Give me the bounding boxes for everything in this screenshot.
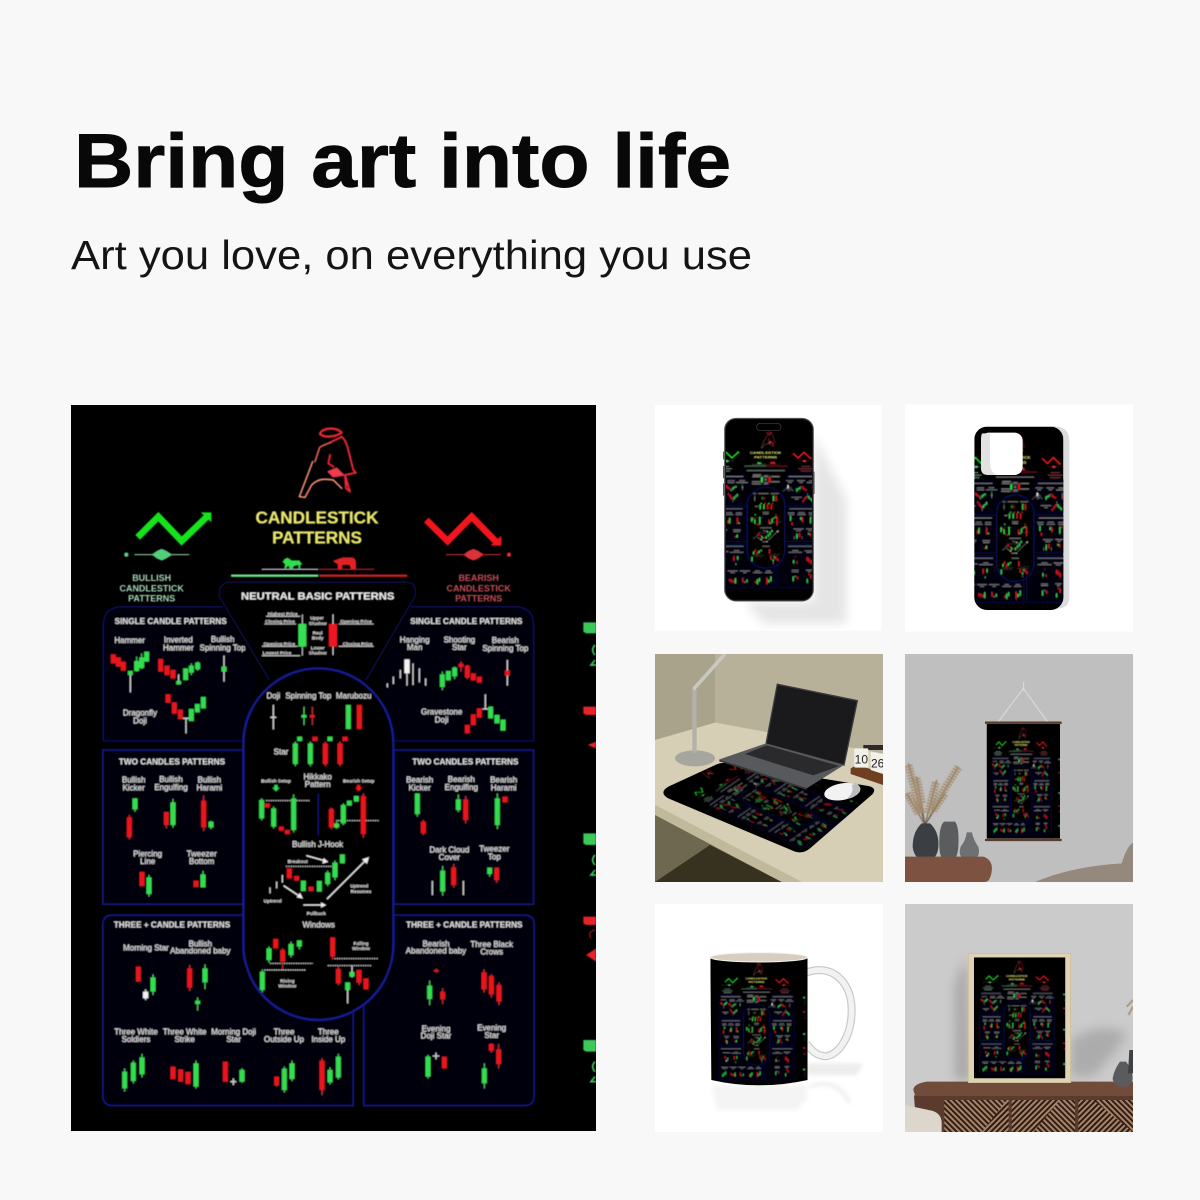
framed artwork: CANDLESTICK: [1006, 974, 1029, 978]
neutral diagram labels: Lower: [311, 645, 325, 650]
case artwork: PATTERNS: [1003, 460, 1026, 465]
armchair: [905, 1105, 942, 1132]
neutral diagram labels: [263, 611, 373, 656]
desk edge and shadow: [655, 805, 802, 882]
walls: [655, 654, 715, 740]
labels: central capsule patterns: Breakout: [288, 859, 308, 864]
mug body with artwork: [710, 953, 808, 1087]
labels: right two candles patterns: Harami: [491, 783, 517, 792]
labels: left two candles patterns: Bullish: [198, 776, 221, 785]
phone screen artwork: [726, 420, 812, 600]
neutral basic patterns panel: [219, 582, 416, 680]
heading: Bring art into life: [74, 119, 731, 204]
phone shadow: [745, 433, 847, 623]
chart: bullish j-hook: [270, 854, 369, 908]
wall shadows: [955, 957, 1127, 1080]
labels: right two candles patterns: Engulfing: [445, 783, 478, 792]
labels: doji, spinning top, marubozu: Doji: [266, 692, 280, 701]
neutral diagram labels: Upper: [310, 616, 324, 621]
labels: right single candle patterns: Spinning Top: [482, 644, 529, 653]
dresser top: [913, 1082, 1133, 1095]
labels: doji, spinning top, marubozu: [266, 692, 371, 701]
label: bearish candlestick patterns: CANDLESTICK: [446, 583, 511, 593]
flip calendar: [851, 745, 885, 785]
framed artwork: PATTERNS: [1009, 977, 1025, 981]
phone screen artwork: PATTERNS: [754, 455, 777, 459]
labels: left two candles patterns: Kicker: [123, 783, 145, 792]
label: bearish candlestick patterns: BEARISH: [458, 573, 499, 583]
labels: right two candles patterns: Bearish: [490, 776, 517, 785]
labels: right three plus candle patterns: Abandoned baby: [406, 947, 466, 956]
labels: doji, spinning top, marubozu: Marubozu: [336, 692, 371, 701]
labels: left two candles patterns: Harami: [196, 783, 222, 792]
labels: central capsule patterns: Window: [278, 983, 297, 988]
labels: right two candles patterns: Dark Cloud: [429, 845, 469, 854]
labels: left three plus candle patterns: THREE + CANDLE PATTERNS: [114, 921, 231, 930]
neutral diagram labels: Lowest Price: [263, 651, 292, 656]
labels: right single candle patterns: Star: [452, 643, 467, 652]
labels: central capsule patterns: Windows: [302, 921, 335, 930]
labels: left three plus candle patterns: Inside Up: [311, 1035, 346, 1044]
side buttons: [724, 452, 814, 496]
neutral diagram labels: Highest Price: [268, 611, 298, 616]
labels: right two candles patterns: Cover: [439, 853, 460, 862]
title: candlestick patterns: [255, 507, 379, 547]
labels: right three plus candle patterns: Evening: [422, 1024, 450, 1033]
labels: central capsule patterns: Window: [352, 946, 370, 951]
tile: phone wallpaper mockup: [723, 418, 846, 622]
flip calendar: 10: [855, 752, 868, 766]
labels: left two candles patterns: Tweezer: [187, 849, 217, 858]
labels: left single candle patterns: Doji: [133, 716, 147, 725]
labels: left single candle patterns: Hammer: [114, 636, 145, 645]
laptop: [719, 684, 857, 790]
desk lamp: [675, 654, 725, 766]
labels: left single candle patterns: Dragonfly: [123, 709, 157, 718]
icon: red down zigzag arrow: [426, 517, 501, 546]
neutral diagram labels: Shadow: [309, 651, 327, 656]
labels: right two candles patterns: Bearish: [448, 775, 475, 784]
cropped edge of repeated artwork: [583, 622, 596, 1082]
labels: left three plus candle patterns: Three White: [163, 1028, 207, 1037]
mug rim: [710, 953, 808, 962]
candles: left two candles patterns: [129, 796, 211, 897]
labels: right single candle patterns: [400, 617, 529, 724]
labels: left three plus candle patterns: Three: [318, 1028, 339, 1037]
labels: left three plus candle patterns: [114, 921, 346, 1044]
labels: central capsule patterns: Uptrend: [264, 899, 282, 904]
candles: right three plus candle patterns: [428, 969, 499, 1088]
labels: left three plus candle patterns: Bullish: [189, 939, 212, 948]
labels: left single candle patterns: SINGLE CANDLE PATTERNS: [115, 617, 227, 626]
labels: left three plus candle patterns: Strike: [174, 1035, 195, 1044]
labels: right single candle patterns: Gravestone: [421, 708, 463, 717]
tile: hanging poster mockup: [905, 654, 1133, 882]
labels: left two candles patterns: Line: [140, 857, 156, 866]
dynamic island: [757, 423, 781, 431]
neutral diagram labels: Body: [312, 636, 324, 641]
phone body: [725, 418, 813, 601]
labels: central capsule patterns: Uptrend: [350, 884, 368, 889]
neutral diagram labels: Shadow: [309, 621, 327, 626]
label: bullish candlestick patterns: BULLISH: [132, 573, 171, 583]
labels: central capsule patterns: Resumes: [351, 889, 372, 894]
icon: bull rider logo: [299, 429, 356, 497]
hanging poster artwork: [987, 724, 1060, 839]
chart: hikkako pattern: [262, 785, 379, 838]
labels: central capsule patterns: Bullish Setup: [261, 778, 291, 783]
hook and string: [998, 682, 1047, 722]
labels: right single candle patterns: Man: [407, 643, 422, 652]
title: candlestick patterns: CANDLESTICK: [255, 507, 379, 527]
dresser patterned front: [944, 1100, 1133, 1132]
labels: left single candle patterns: [114, 617, 246, 725]
candles: star row: [295, 742, 340, 766]
wooden frame: [968, 953, 1071, 1083]
mug handle: [806, 970, 852, 1056]
labels: right single candle patterns: Doji: [435, 715, 449, 724]
candles: doji, spinning top, marubozu: [270, 705, 359, 741]
labels: right two candles patterns: Bearish: [406, 776, 433, 785]
labels: left three plus candle patterns: Morning Star: [123, 943, 169, 952]
label: bearish candlestick patterns: PATTERNS: [455, 593, 502, 603]
camera cutout: [981, 433, 1023, 475]
side table: [905, 857, 992, 882]
main poster: candlestick patterns: [71, 405, 596, 1131]
mug body with artwork: CANDLESTICK: [745, 977, 768, 981]
labels: right two candles patterns: [406, 758, 519, 862]
labels: right single candle patterns: SINGLE CANDLE PATTERNS: [410, 617, 523, 626]
labels: left three plus candle patterns: Abandoned baby: [170, 947, 231, 956]
labels: central capsule patterns: Hikkako: [303, 773, 332, 782]
neutral diagram labels: Closing Price: [265, 619, 295, 624]
label: bullish candlestick patterns: PATTERNS: [128, 593, 175, 603]
labels: left single candle patterns: Spinning Top: [200, 643, 246, 652]
candles: left single candle patterns: [113, 652, 224, 733]
labels: left three plus candle patterns: Three White: [114, 1028, 158, 1037]
labels: central capsule patterns: Rising: [280, 978, 295, 983]
hanging poster artwork: PATTERNS: [1015, 743, 1028, 747]
label: bearish candlestick patterns: [446, 573, 511, 603]
labels: left three plus candle patterns: Morning Doji: [211, 1028, 256, 1037]
title: candlestick patterns: PATTERNS: [272, 527, 362, 547]
labels: left three plus candle patterns: Outside Up: [264, 1035, 305, 1044]
case artwork: [974, 426, 1064, 610]
framed artwork: [974, 957, 1065, 1078]
candles: right two candles patterns: [417, 793, 505, 896]
labels: right three plus candle patterns: Three Black: [470, 940, 513, 949]
labels: central capsule patterns: Bearish Setup: [343, 778, 374, 783]
labels: central capsule patterns: Bullish J-Hook: [292, 840, 343, 849]
labels: central capsule patterns: Falling: [353, 941, 369, 946]
tile: mug mockup: [655, 904, 883, 1132]
labels: right single candle patterns: Shooting: [444, 635, 475, 644]
vases: [913, 822, 979, 862]
labels: right two candles patterns: Tweezer: [479, 845, 510, 854]
labels: right three plus candle patterns: THREE + CANDLE PATTERNS: [406, 921, 523, 930]
labels: right two candles patterns: Top: [488, 852, 501, 861]
labels: left two candles patterns: Bottom: [189, 857, 215, 866]
labels: left two candles patterns: Bullish: [122, 776, 145, 785]
labels: left three plus candle patterns: Three: [274, 1028, 295, 1037]
mug body with artwork: PATTERNS: [748, 980, 764, 984]
labels: right single candle patterns: Bearish: [492, 636, 519, 645]
case artwork: CANDLESTICK: [999, 455, 1031, 460]
neutral diagram labels: Real: [313, 630, 323, 635]
heading: neutral basic patterns: NEUTRAL BASIC PATTERNS: [241, 591, 395, 602]
labels: left single candle patterns: Bullish: [211, 635, 234, 644]
labels: right three plus candle patterns: Evening: [477, 1024, 506, 1033]
vases and plant: [1113, 1000, 1133, 1087]
labels: right two candles patterns: Kicker: [409, 783, 431, 792]
labels: left single candle patterns: Inverted: [164, 636, 193, 645]
phone screen artwork: CANDLESTICK: [750, 450, 781, 455]
neutral diagram labels: Opening Price: [340, 619, 372, 624]
label: bullish candlestick patterns: [119, 573, 184, 603]
central capsule panel: [243, 668, 393, 1020]
labels: central capsule patterns: Pullback: [307, 911, 326, 916]
labels: left two candles patterns: Bullish: [159, 775, 183, 784]
tile: desk mat mockup: [655, 654, 885, 882]
mug shadow and reflection: [712, 1063, 863, 1110]
mouse: [823, 780, 862, 803]
tile: framed poster mockup: [905, 904, 1133, 1132]
labels: right three plus candle patterns: Bearish: [422, 939, 450, 948]
tile: phone case mockup: [974, 426, 1070, 610]
dried pampas plant: [907, 763, 958, 825]
labels: left single candle patterns: Hammer: [163, 644, 194, 653]
candles: right single candle patterns: [387, 659, 507, 733]
labels: right two candles patterns: TWO CANDLES PATTERNS: [412, 758, 519, 767]
flip calendar: 26: [871, 756, 885, 770]
label: bullish candlestick patterns: CANDLESTICK: [119, 583, 184, 593]
chart: rising and falling windows: [262, 937, 378, 1003]
sofa: [1035, 843, 1133, 882]
labels: left two candles patterns: Engulfing: [154, 783, 188, 792]
wooden rods: [985, 723, 1062, 840]
hanging poster artwork: CANDLESTICK: [1012, 740, 1030, 744]
neutral diagram labels: Closing Price: [343, 641, 373, 646]
labels: right three plus candle patterns: [406, 921, 523, 1040]
labels: left two candles patterns: [119, 758, 226, 866]
desk top: [655, 723, 883, 882]
labels: right three plus candle patterns: Star: [484, 1031, 499, 1040]
labels: left three plus candle patterns: Star: [226, 1035, 241, 1044]
labels: left two candles patterns: TWO CANDLES PATTERNS: [119, 758, 226, 767]
labels: left two candles patterns: Piercing: [133, 849, 162, 858]
labels: left three plus candle patterns: Soldiers: [122, 1035, 150, 1044]
labels: right single candle patterns: Hanging: [400, 636, 430, 645]
labels: central capsule patterns: Star: [274, 748, 289, 757]
subheading: Art you love, on everything you use: [71, 232, 752, 278]
bull and bear divider: [231, 557, 407, 576]
case side edge: [1052, 426, 1069, 610]
mouse pad with artwork: [655, 747, 883, 860]
labels: right three plus candle patterns: Crows: [480, 947, 503, 956]
labels: right three plus candle patterns: Doji Star: [421, 1031, 452, 1040]
labels: doji, spinning top, marubozu: Spinning Top: [285, 692, 332, 701]
icon: green up zigzag arrow: [138, 512, 211, 541]
labels: central capsule patterns: Pattern: [305, 780, 331, 789]
neutral diagram labels: Opening Price: [264, 641, 296, 646]
labels: central capsule patterns: [261, 748, 374, 988]
panel frames: [103, 607, 534, 1106]
candles: left three plus candle patterns: [125, 964, 338, 1095]
red ornament divider: [446, 549, 511, 560]
green ornament divider: [124, 549, 189, 560]
